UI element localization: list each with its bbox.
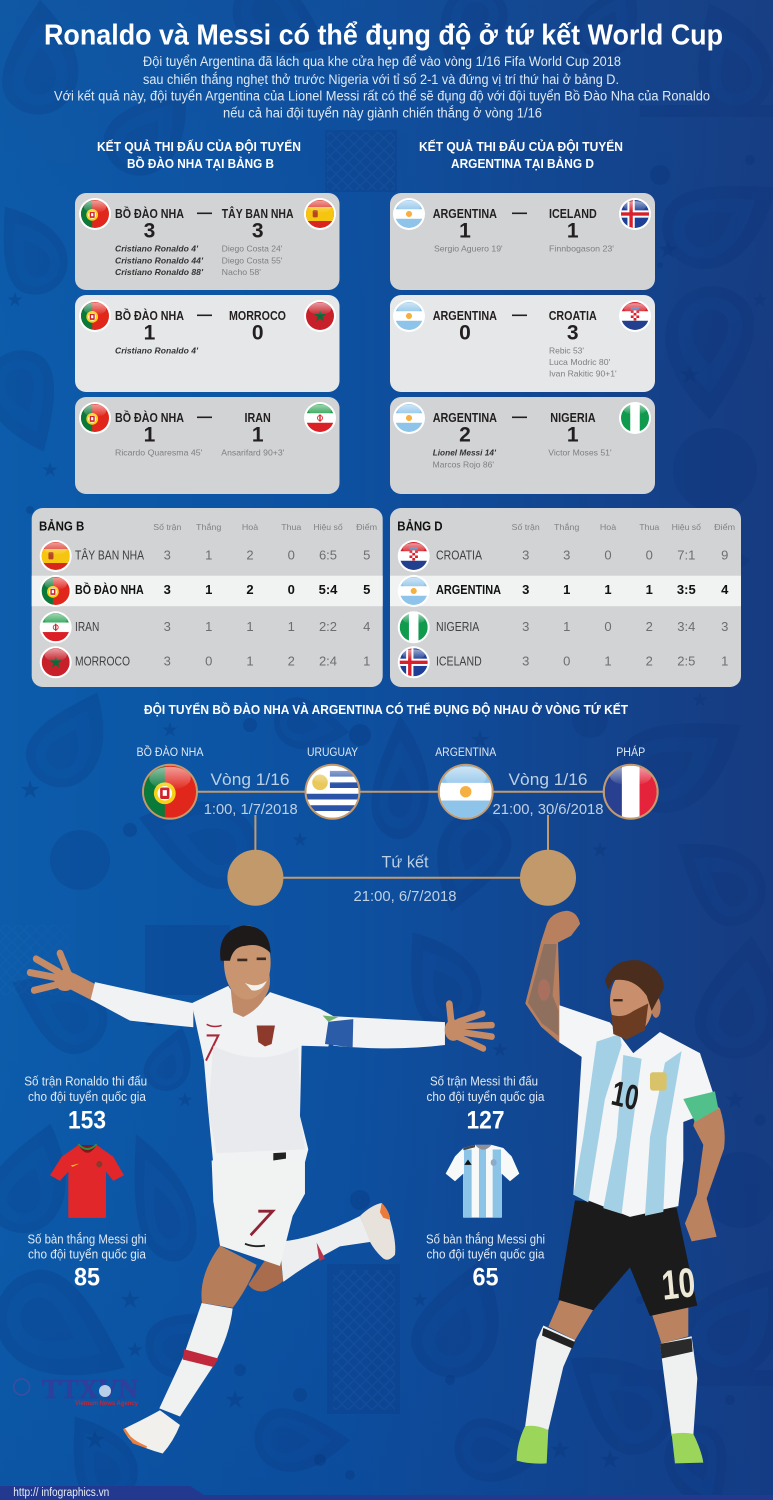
panel: Argentina vs Nigeria: 2 [459,424,471,446]
panel: Portugal vs Morocco: 0 [252,322,264,344]
panel: Group B table: 0 [288,582,295,597]
panel: Portugal vs Iran: Ricardo Quaresma 45' [115,448,203,458]
panel: Argentina vs Iceland: 1 [459,220,471,242]
Messi statistics: 65 [472,1263,499,1291]
panel: Group B table: 1 [363,654,370,669]
panel: Group D table: NIGERIA [436,620,480,634]
illustration: Messi: 10 [660,1260,697,1309]
panel: Group B table: BẢNG B [39,518,84,534]
panel: Group D table: Điểm [714,522,735,532]
Ronaldo statistics: cho đội tuyển quốc gia [28,1089,147,1104]
Messi statistics [426,1074,545,1291]
panel: Argentina vs Iceland: ARGENTINA [433,207,497,221]
right arm [333,1016,445,1048]
Messi statistics: Số trận Messi thi đấu [430,1074,538,1088]
bracket diagram: 21:00, 6/7/2018 [354,888,456,905]
panel: Group D table: 3 [522,619,529,634]
panel: Group B table: 1 [205,548,212,562]
logo: TTXVN [14,1374,139,1407]
panel: Group B table: 5:4 [319,582,338,597]
panel: Group D table: 0 [563,654,570,669]
panel: Argentina vs Croatia: Luca Modric 80' [549,357,611,367]
panel: Argentina vs Nigeria: NIGERIA [550,411,596,425]
intro text [54,54,710,120]
panel: Group B table: 3 [164,654,171,669]
panel: Argentina vs Croatia: CROATIA [549,309,597,323]
bracket diagram [136,746,659,906]
panel: Portugal vs Iran: Ansarifard 90+3' [221,448,285,458]
panel: Group B table: Điểm [356,522,377,532]
Messi statistics: cho đội tuyển quốc gia [426,1089,545,1104]
Messi statistics: cho đội tuyển quốc gia [426,1247,545,1262]
panel: Argentina vs Iceland: Sergio Aguero 19' [434,244,503,254]
panel: Group D table: 3 [721,619,728,634]
panel: Group D table: 1 [604,654,612,669]
panel: Group D table: 2:5 [677,654,695,669]
panel: Group B table [32,508,383,687]
title: Ronaldo và Messi có thể đụng độ ở tứ kết World Cup [44,20,723,52]
panel: Group D table: Thắng [554,522,580,532]
heading: Argentina results: KẾT QUẢ THI ĐẤU CỦA ĐỘI TUYỂN [419,139,623,154]
front leg [201,1246,257,1308]
panel: Group B table: 5 [363,582,370,597]
bracket diagram: 1:00, 1/7/2018 [204,801,298,818]
panel: Portugal vs Iran: BỒ ĐÀO NHA [115,410,184,425]
panel: Group B table: 0 [205,654,212,669]
panel: Group B table: 1 [246,654,254,669]
illustration: Ronaldo [30,926,445,1454]
bracket diagram: Tứ kết [382,853,429,872]
panel: Argentina vs Iceland: ICELAND [549,207,597,221]
panel: Argentina vs Croatia: 3 [567,322,579,344]
panel: Group D table: BẢNG D [397,518,443,534]
panel: Portugal vs Morocco: 1 [144,322,156,344]
heading: Argentina results [419,139,623,171]
panel: Argentina vs Nigeria: Victor Moses 51' [548,448,612,458]
panel: Group D table: 7:1 [677,548,695,562]
bracket diagram: Vòng 1/16 [210,770,290,789]
panel: Portugal vs Iran: 1 [144,424,156,446]
panel: Argentina vs Nigeria [390,397,655,494]
panel: Group B table: 0 [288,548,295,562]
panel: Argentina vs Nigeria: 1 [567,424,579,446]
panel: Group B table: 5 [363,548,370,562]
panel: Portugal vs Iran: 1 [252,424,264,446]
panel: Group B table: 3 [164,619,171,634]
panel: Argentina vs Nigeria: Marcos Rojo 86' [433,460,494,470]
panel: Group B table: 1 [205,582,212,597]
panel: Group B table: 4 [363,619,370,634]
panel: Group D table: ARGENTINA [436,583,501,597]
panel: Group B table: 3 [164,548,171,562]
panel: Group B table: Hiệu số [313,522,343,532]
panel: Group D table: 4 [721,582,729,597]
Ronaldo statistics: Số bàn thắng Messi ghi [28,1232,147,1247]
heading: quarter-final path: ĐỘI TUYỂN BỒ ĐÀO NHA VÀ ARGENTINA CÓ THỂ ĐỤNG ĐỘ NHAU Ở VÒNG TỨ KẾT [144,702,628,717]
panel: Portugal vs Spain: Cristiano Ronaldo 4' [115,244,199,254]
panel: Portugal vs Morocco [75,295,340,392]
panel: Group D table: 3 [522,582,529,597]
panel: Group B table: IRAN [75,620,99,634]
icon: Portugal jersey [50,1144,124,1218]
panel: Argentina vs Nigeria: ARGENTINA [433,411,497,425]
panel: Group D table: Thua [639,522,660,532]
bracket diagram: BỒ ĐÀO NHA [136,746,204,759]
panel: Portugal vs Iran: IRAN [244,411,271,425]
heading: Portugal results [97,139,301,171]
panel: Portugal vs Spain: Diego Costa 55' [222,255,283,265]
illustration: Messi [517,911,725,1464]
panel: Group B table: MORROCO [75,655,130,669]
panel: Portugal vs Spain: TÂY BAN NHA [222,206,294,221]
panel: Portugal vs Spain: Diego Costa 24' [222,244,283,254]
panel: Portugal vs Iran [75,397,340,494]
Messi statistics: Số bàn thắng Messi ghi [426,1231,545,1246]
bracket diagram: URUGUAY [307,747,358,759]
panel: Group D table [390,508,741,687]
bracket diagram: 21:00, 30/6/2018 [492,801,604,818]
shorts [212,1157,305,1266]
footer band [0,1486,773,1500]
panel: Argentina vs Croatia: ARGENTINA [433,309,497,323]
panel: Group B table: 1 [246,619,254,634]
Messi statistics: 127 [466,1106,504,1134]
panel: Portugal vs Spain: Cristiano Ronaldo 88' [115,267,204,277]
panel: Group D table: 9 [721,548,728,562]
left arm, hand [30,953,93,992]
panel: Group D table: Hoà [600,522,616,532]
icon: Argentina jersey [446,1145,519,1218]
panel: Group B table: 2 [246,582,254,597]
panel: Group B table: TÂY BAN NHA [75,548,145,562]
bracket diagram: Vòng 1/16 [508,770,588,789]
logo: TTXVN: TTXVN [42,1374,139,1404]
panel: Group D table: 3:4 [677,619,695,634]
illustration: Ronaldo right hand [447,1004,492,1048]
panel: Group D table: 0 [646,548,653,562]
panel: Group B table: 2:4 [319,654,337,669]
panel: Group D table: 1 [646,582,653,597]
panel: Group D table: 1 [604,582,612,597]
panel: Group D table: 3 [522,548,529,562]
intro text: Với kết quả này, đội tuyển Argentina của Lionel Messi rất có thể sẽ đụng độ với đội tuyển Bồ Đào Nha của Ronaldo [54,88,710,104]
shirt [559,1005,718,1217]
intro text: Đội tuyển Argentina đã lách qua khe cửa hẹp để vào vòng 1/16 Fifa World Cup 2018 [143,54,621,69]
raised arm [526,911,579,1042]
panel: Portugal vs Spain: Cristiano Ronaldo 44' [115,255,204,265]
panel: Argentina vs Iceland: Finnbogason 23' [549,244,614,254]
panel: Group D table: 2 [646,619,653,634]
bracket diagram: ARGENTINA [435,747,496,759]
panel: Group B table: Số trận [153,522,182,532]
Ronaldo statistics: 153 [68,1106,106,1134]
heading: Argentina results: ARGENTINA TẠI BẢNG D [451,156,594,171]
right arm [685,1091,725,1241]
panel: Argentina vs Croatia: Rebic 53' [549,346,584,356]
footer band: http:// infographics.vn [13,1487,109,1499]
logo: TTXVN: Vietnam News Agency [75,1400,138,1407]
panel: Group D table: Hiệu số [672,522,701,532]
Ronaldo statistics: cho đội tuyển quốc gia [28,1246,147,1262]
panel: Group D table: 0 [604,619,612,634]
heading: Portugal results: KẾT QUẢ THI ĐẤU CỦA ĐỘI TUYỂN [97,139,301,154]
illustration: Messi: 10 [609,1073,642,1118]
panel: Argentina vs Croatia [390,295,655,392]
legs [548,1300,593,1340]
panel: Argentina vs Croatia: Ivan Rakitic 90+1' [549,369,617,379]
panel: Group D table: Số trận [512,522,540,532]
shirt [192,986,337,1164]
panel: Group D table: 1 [563,582,570,597]
panel: Group D table: ICELAND [436,655,482,669]
bracket diagram: PHÁP [616,746,645,759]
panel: Portugal vs Spain: 3 [144,220,155,242]
panel: Portugal vs Morocco: MORROCO [229,309,286,323]
panel: Group B table: 2 [246,548,254,562]
panel: Group B table: Hoà [242,522,258,532]
intro text: sau chiến thắng nghẹt thở trước Nigeria với tỉ số 2-1 và đứng vị trí thứ hai ở bảng D. [143,72,619,87]
intro text: nếu cả hai đội tuyển này giành chiến thắng ở vòng 1/16 [223,106,542,120]
panel: Portugal vs Spain [75,193,340,290]
heading: Portugal results: BỒ ĐÀO NHA TẠI BẢNG B [127,156,274,171]
shorts [558,1200,697,1316]
panel: Group B table: 3 [164,582,171,597]
panel: Portugal vs Spain: 3 [252,220,264,242]
head [230,964,270,1017]
panel: Portugal vs Morocco: Cristiano Ronaldo 4' [115,346,199,356]
panel: Argentina vs Croatia: 0 [459,322,471,344]
panel: Group B table: BỒ ĐÀO NHA [75,582,144,597]
panel: Group D table: 1 [721,654,728,669]
Ronaldo statistics: Số trận Ronaldo thi đấu [24,1074,147,1088]
panel: Group D table: 0 [604,548,612,562]
panel: Group D table: 1 [563,619,570,634]
panel: Group D table: 3:5 [677,582,696,597]
panel: Group B table: 2:2 [319,619,337,634]
panel: Argentina vs Iceland [390,193,655,290]
panel: Group D table: 2 [646,654,653,669]
panel: Group B table: 1 [205,619,212,634]
panel: Portugal vs Spain: Nacho 58' [222,267,261,277]
panel: Group D table: 3 [563,548,570,562]
panel: Argentina vs Iceland: 1 [567,220,579,242]
head [610,969,653,1034]
right leg [248,1241,283,1291]
panel: Group B table: Thắng [196,522,222,532]
panel: Portugal vs Spain: BỒ ĐÀO NHA [115,206,184,221]
panel: Group B table: 2 [288,654,295,669]
panel: Group B table: Thua [281,522,302,532]
panel: Argentina vs Nigeria: Lionel Messi 14' [433,448,497,458]
panel: Portugal vs Morocco: BỒ ĐÀO NHA [115,308,184,323]
panel: Group D table: CROATIA [436,548,483,562]
Ronaldo statistics: 85 [74,1264,100,1292]
panel: Group D table: 3 [522,654,529,669]
panel: Group B table: 6:5 [319,548,337,562]
panel: Group B table: 1 [288,619,295,634]
Ronaldo statistics [24,1074,147,1292]
